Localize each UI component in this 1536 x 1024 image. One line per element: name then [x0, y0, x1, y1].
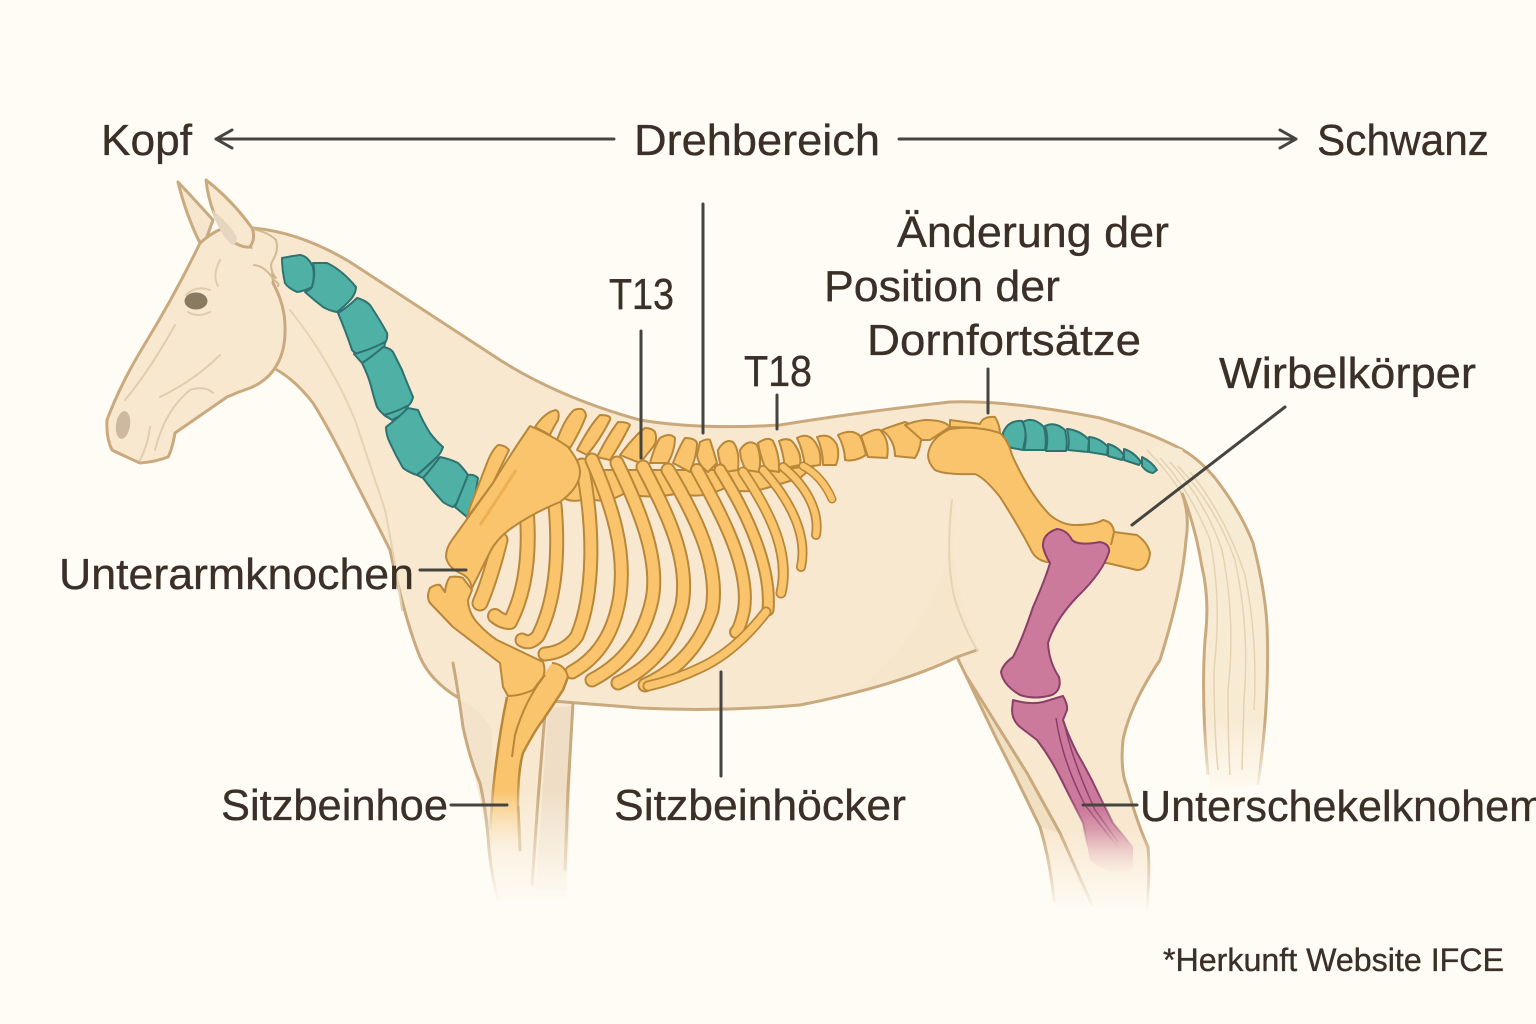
horse tail	[1147, 446, 1268, 790]
tibia (pink)	[1012, 696, 1133, 873]
label: Sitzbeinhoe: Sitzbeinhoe	[221, 781, 448, 830]
rib 2	[495, 515, 528, 622]
inner ear	[212, 210, 237, 245]
label: Schwanz: Schwanz	[1317, 116, 1489, 165]
flank crease lines	[290, 310, 977, 650]
eye	[184, 292, 208, 310]
horse body silhouette	[250, 228, 1187, 910]
label: Wirbelkörper: Wirbelkörper	[1219, 349, 1476, 398]
left ear	[178, 182, 213, 245]
label: T13: T13	[609, 270, 674, 319]
tail vertebrae (teal)	[1003, 420, 1157, 473]
leader lines	[420, 204, 1285, 805]
label: Drehbereich: Drehbereich	[634, 116, 880, 165]
label: T18: T18	[744, 347, 812, 396]
femur (pink)	[1001, 529, 1109, 698]
label: Unterarmknochen: Unterarmknochen	[59, 550, 414, 599]
neck vertebrae (teal)	[282, 255, 478, 517]
poll outline	[252, 229, 278, 286]
horse head	[107, 180, 285, 463]
humerus	[428, 577, 544, 696]
body shading	[460, 500, 1060, 890]
rib 9	[697, 470, 745, 632]
rib 12	[763, 470, 803, 567]
rib 4	[545, 465, 591, 654]
vertebral bodies band	[560, 465, 815, 501]
nostril	[114, 410, 132, 440]
label: Änderung der Position der Dornfortsätze	[824, 208, 1169, 365]
label: Sitzbeinhöcker: Sitzbeinhöcker	[614, 781, 906, 830]
right ear	[206, 180, 254, 247]
label: Änderung der Position der Dornfortsätze: Dornfortsätze	[867, 316, 1141, 365]
hip bone	[928, 428, 1150, 570]
arrow: toward Schwanz	[899, 130, 1296, 148]
rib 14	[803, 466, 832, 499]
rib 5	[572, 460, 621, 672]
hind leg fade	[1030, 830, 1160, 920]
source note: *Herkunft Website IFCE	[1163, 942, 1504, 978]
rib 13	[783, 467, 817, 535]
spinous processes	[535, 409, 1000, 472]
costal arch	[648, 612, 766, 686]
poll tuft	[250, 229, 277, 282]
label: Kopf: Kopf	[101, 116, 193, 165]
rib 3	[522, 505, 557, 642]
head shape	[107, 228, 285, 463]
body outline	[252, 228, 1187, 910]
foreleg lower bones	[490, 662, 568, 850]
foreleg fade	[440, 790, 590, 910]
label: Änderung der Position der Dornfortsätze: Position der	[824, 262, 1060, 311]
rib 11	[743, 472, 783, 593]
rib 1	[480, 540, 500, 603]
label: Änderung der Position der Dornfortsätze: Änderung der	[897, 208, 1169, 257]
rib 8	[645, 470, 714, 685]
scapula	[446, 426, 580, 588]
arrow: toward Kopf	[216, 130, 614, 148]
rib 7	[618, 467, 684, 683]
ribs	[480, 460, 832, 686]
rib 6	[592, 463, 654, 680]
mouth and face lines	[125, 260, 220, 460]
rib 10	[720, 470, 768, 610]
